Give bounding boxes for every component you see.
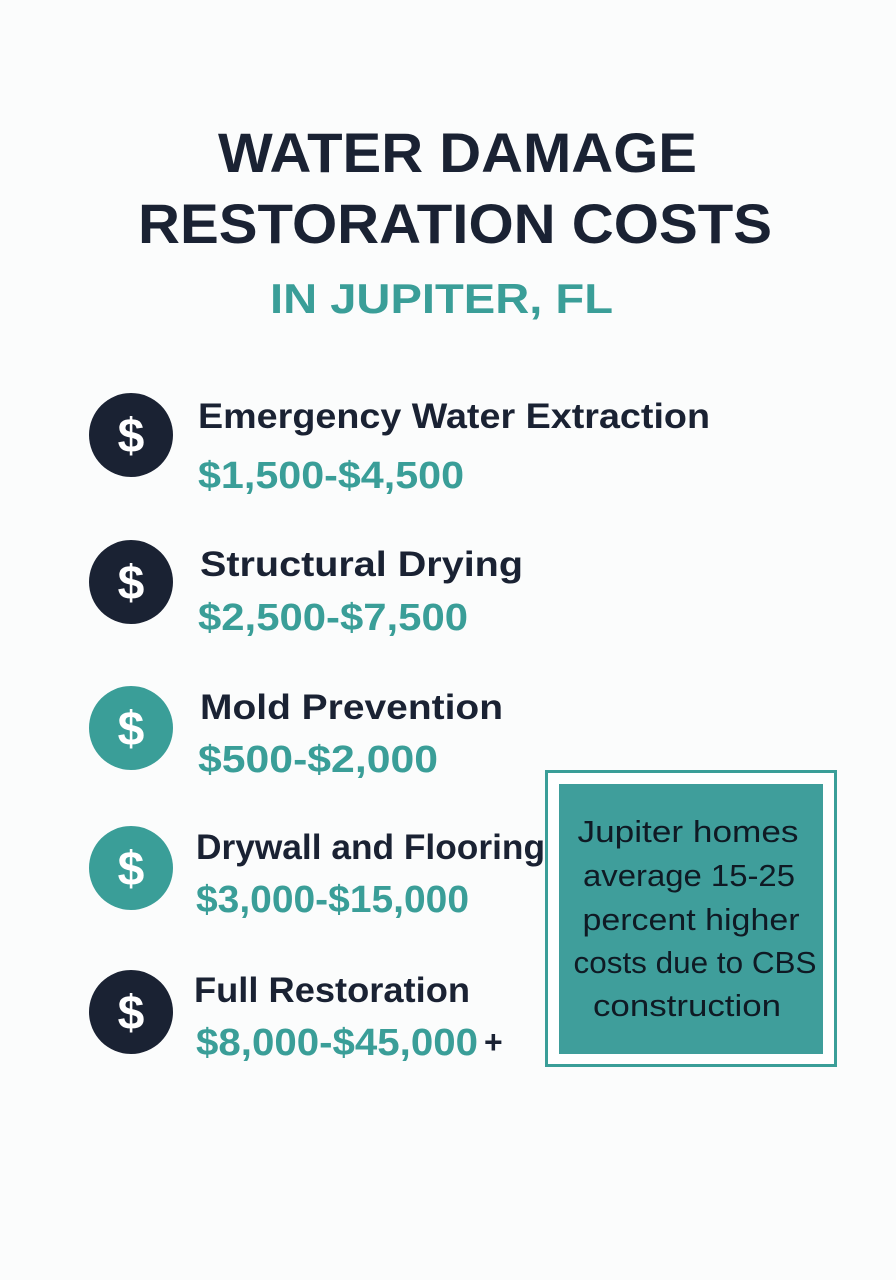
row: emergency water extraction: $1,500-$4,500 bbox=[198, 455, 464, 497]
icon: dollar dark: $ bbox=[118, 987, 145, 1040]
callout: average 15-25 bbox=[583, 858, 795, 893]
callout: percent higher bbox=[582, 902, 800, 937]
icon: dollar dark bbox=[89, 970, 173, 1054]
row: emergency water extraction bbox=[89, 393, 710, 497]
row: structural drying bbox=[89, 540, 523, 639]
row: mold prevention: Mold Prevention bbox=[200, 688, 503, 727]
callout: costs due to CBS bbox=[574, 945, 816, 980]
icon: dollar dark: $ bbox=[118, 557, 145, 610]
title: WATER DAMAGE bbox=[218, 121, 697, 184]
row: mold prevention: $500-$2,000 bbox=[198, 739, 438, 781]
icon: dollar teal bbox=[89, 686, 173, 770]
row: drywall and flooring: Drywall and Flooring bbox=[196, 828, 545, 867]
row: drywall and flooring: $3,000-$15,000 bbox=[196, 879, 469, 921]
row: structural drying: $2,500-$7,500 bbox=[198, 597, 468, 639]
row: full restoration: $8,000-$45,000 bbox=[196, 1022, 478, 1064]
icon: dollar teal: $ bbox=[118, 703, 145, 756]
row: full restoration bbox=[89, 970, 503, 1064]
icon: dollar teal: $ bbox=[118, 843, 145, 896]
title: RESTORATION COSTS bbox=[138, 192, 772, 255]
callout: construction bbox=[593, 988, 781, 1023]
row: structural drying: Structural Drying bbox=[200, 545, 523, 584]
title bbox=[138, 121, 772, 322]
row: full restoration: Full Restoration bbox=[194, 971, 470, 1010]
icon: dollar dark bbox=[89, 540, 173, 624]
row: full restoration: + bbox=[484, 1024, 503, 1060]
row: emergency water extraction: Emergency Water Extraction bbox=[198, 397, 710, 436]
row: mold prevention bbox=[89, 686, 503, 781]
title: IN JUPITER, FL bbox=[270, 275, 613, 322]
icon: dollar teal bbox=[89, 826, 173, 910]
row: drywall and flooring bbox=[89, 826, 545, 921]
callout bbox=[546, 772, 836, 1066]
callout: Jupiter homes bbox=[578, 814, 798, 849]
icon: dollar dark bbox=[89, 393, 173, 477]
icon: dollar dark: $ bbox=[118, 410, 145, 463]
